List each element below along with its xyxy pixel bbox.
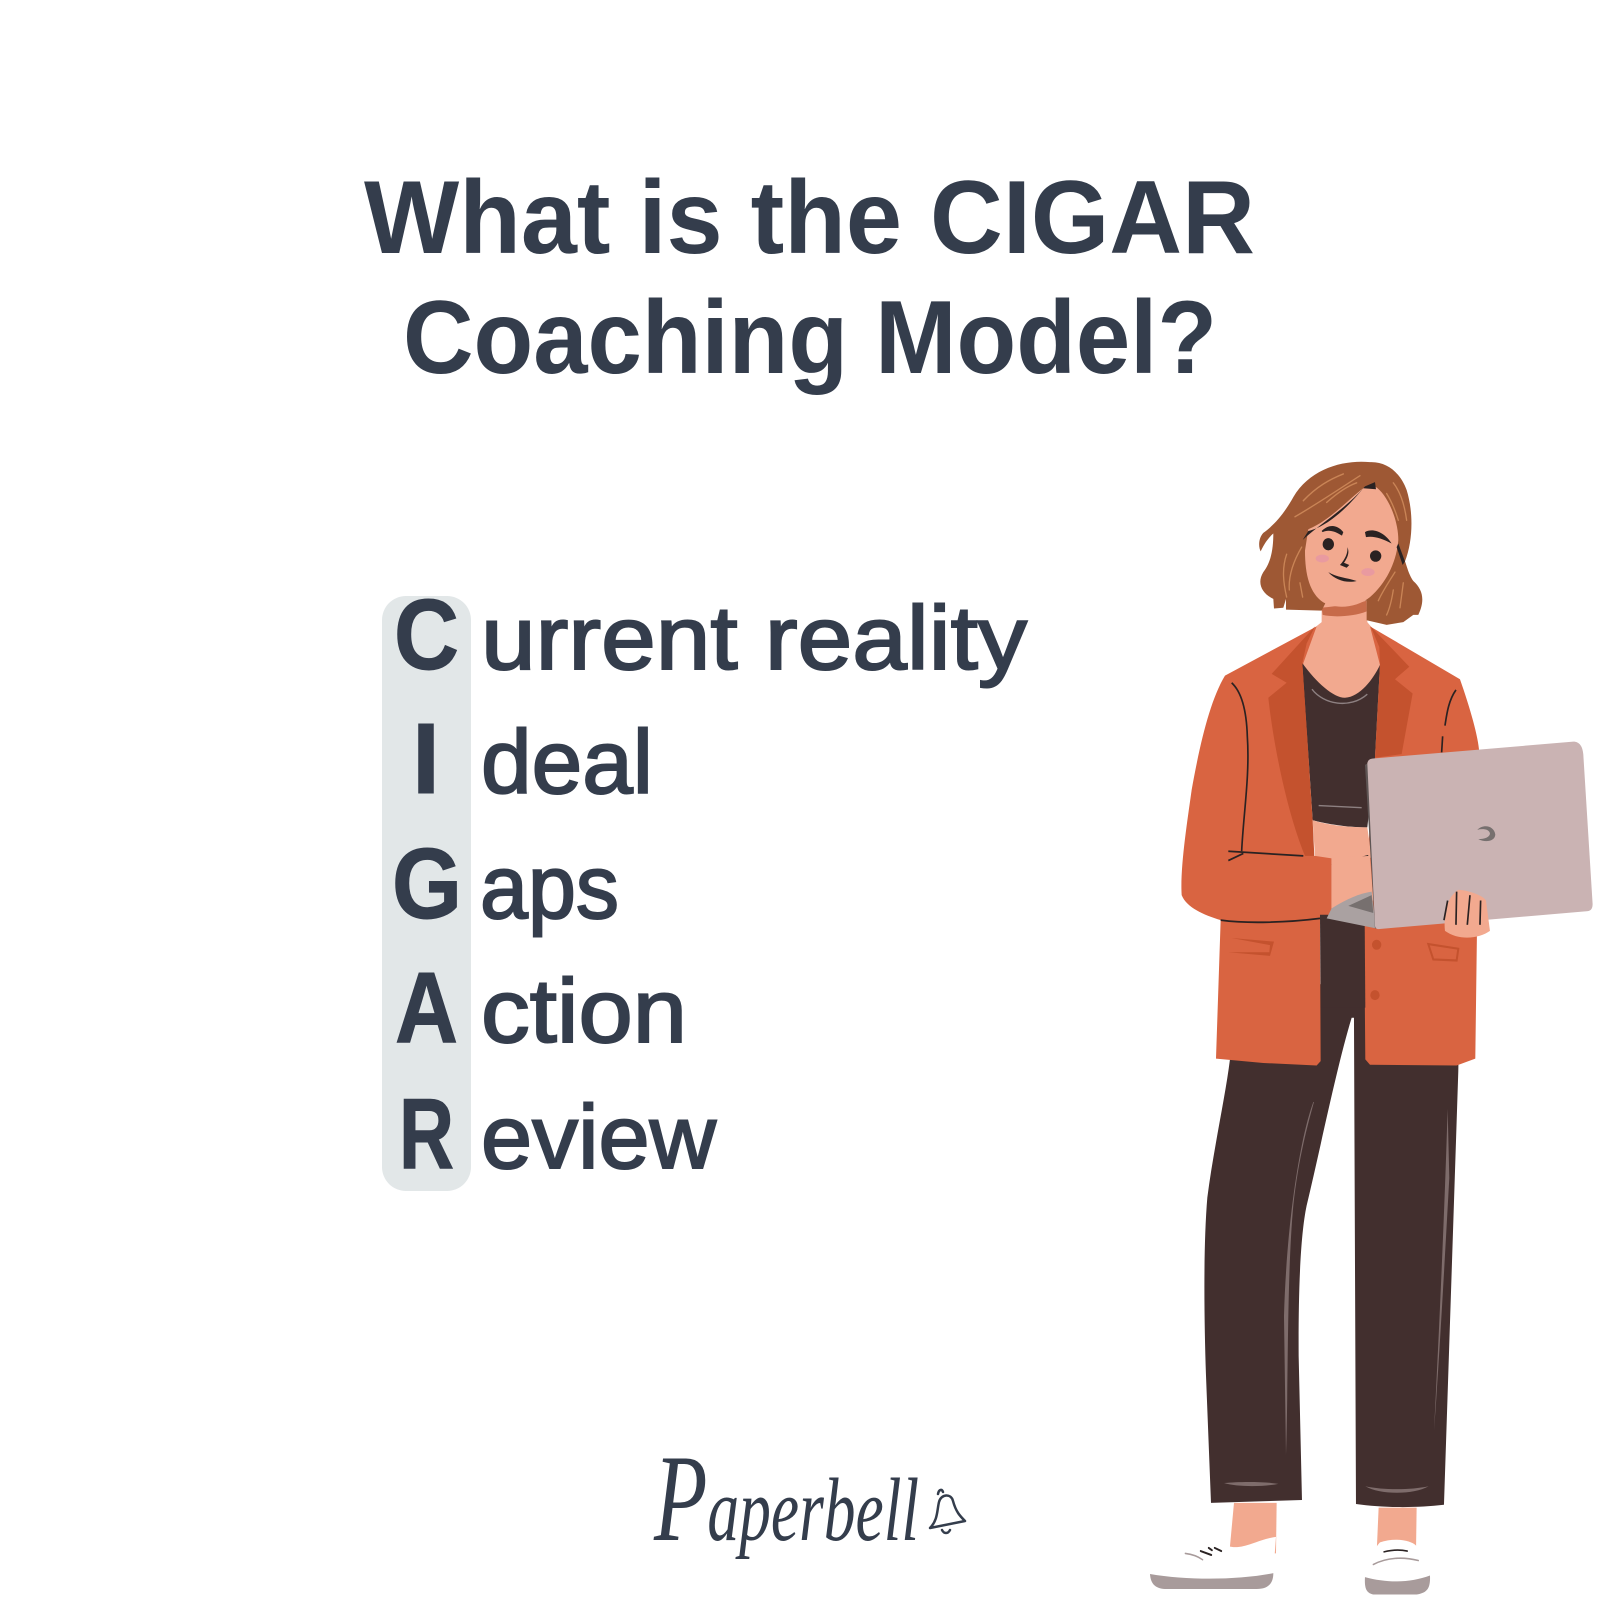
figure: upper body [1181, 462, 1593, 1065]
figure: jacket [1181, 626, 1479, 1065]
figure: typing hand [1327, 856, 1376, 928]
figure: hair highlights [1283, 474, 1407, 615]
item: Action: A [395, 952, 458, 1064]
figure: face [1303, 482, 1405, 607]
item: Gaps [392, 828, 619, 940]
figure: cheeks [1316, 555, 1375, 576]
icon: bell [930, 1490, 965, 1533]
figure: eyes, brows, nose, mouth [1322, 526, 1392, 582]
panel: acronym highlight pill [382, 596, 471, 1191]
figure: neck and chest [1300, 601, 1383, 711]
list: CIGAR words [392, 579, 1027, 1190]
item: Action [395, 952, 687, 1064]
item: Review [399, 1078, 717, 1190]
figure: laptop [1365, 742, 1593, 929]
item: Gaps: G [392, 828, 462, 940]
title: Coaching Model? [403, 280, 1217, 396]
figure: holding hand [1444, 890, 1490, 938]
item: Ideal: deal [481, 713, 653, 813]
item: Review: R [399, 1078, 454, 1190]
figure: jacket seams and pockets [1221, 683, 1458, 1000]
figure: lapels [1268, 626, 1413, 856]
item: Current reality: C [394, 579, 459, 691]
item: Current reality: urrent reality [481, 589, 1027, 689]
item: Review: eview [481, 1088, 717, 1188]
figure: hair [1259, 462, 1422, 625]
title [364, 160, 1255, 396]
figure: trousers and shoes [1150, 984, 1460, 1595]
logo wordmark: Paperbell [653, 1430, 919, 1567]
figure: top [1302, 663, 1380, 1008]
title: What is the CIGAR [364, 160, 1255, 276]
item: Gaps: aps [480, 838, 619, 938]
illustration: woman holding laptop [1150, 462, 1593, 1595]
logo: Paperbell [653, 1430, 965, 1567]
item: Action: ction [481, 962, 687, 1062]
figure: midriff [1313, 820, 1372, 858]
item: Ideal [412, 703, 653, 815]
item: Ideal: I [412, 703, 440, 815]
